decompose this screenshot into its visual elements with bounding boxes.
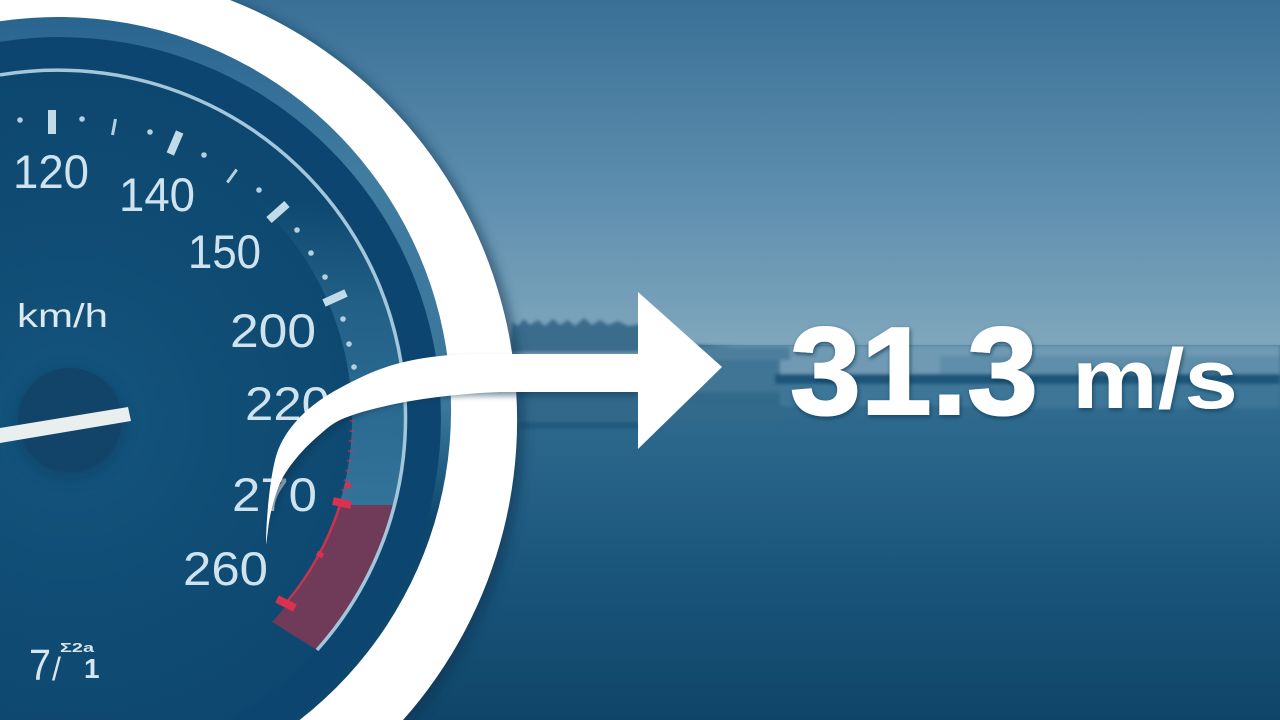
background: sky (0, 0, 1280, 350)
curved arrow (266, 292, 722, 545)
speed labels (13, 145, 330, 595)
white dial ring shadow (0, 0, 523, 720)
speed labels: 200 (230, 304, 316, 357)
odometer label: 1 (84, 653, 100, 684)
value 31.3: 31.3 (790, 303, 1038, 441)
background: shoreline and trees (500, 318, 1280, 429)
odometer label: 7 (29, 641, 51, 690)
scale arc (0, 70, 406, 650)
speed labels: 150 (188, 225, 261, 278)
odometer label (29, 640, 100, 690)
unit m/s: m/s (1072, 332, 1238, 426)
dial face (0, 70, 406, 720)
background: sea (0, 345, 1280, 720)
speed labels: 270 (232, 468, 317, 521)
red ticks (277, 420, 352, 608)
tick dots (17, 116, 357, 370)
white dial ring (0, 0, 517, 720)
arrow shadow (268, 358, 638, 530)
speedometer dial (0, 17, 451, 720)
lighter scale sector (255, 200, 404, 505)
odometer label: / (52, 651, 61, 687)
needle hub (16, 370, 124, 478)
speed labels: 140 (119, 168, 195, 221)
speed labels: 120 (13, 145, 89, 198)
odometer label: Σ2a (60, 640, 95, 655)
minor ticks (112, 119, 237, 182)
dial outer band (0, 17, 451, 720)
speed labels: 220 (245, 377, 330, 430)
red zone (272, 505, 393, 650)
dial inner band (0, 37, 441, 720)
speed labels: 260 (183, 542, 268, 595)
unit label km/h: km/h (17, 297, 108, 334)
needle (0, 407, 131, 443)
major ticks (52, 110, 346, 303)
